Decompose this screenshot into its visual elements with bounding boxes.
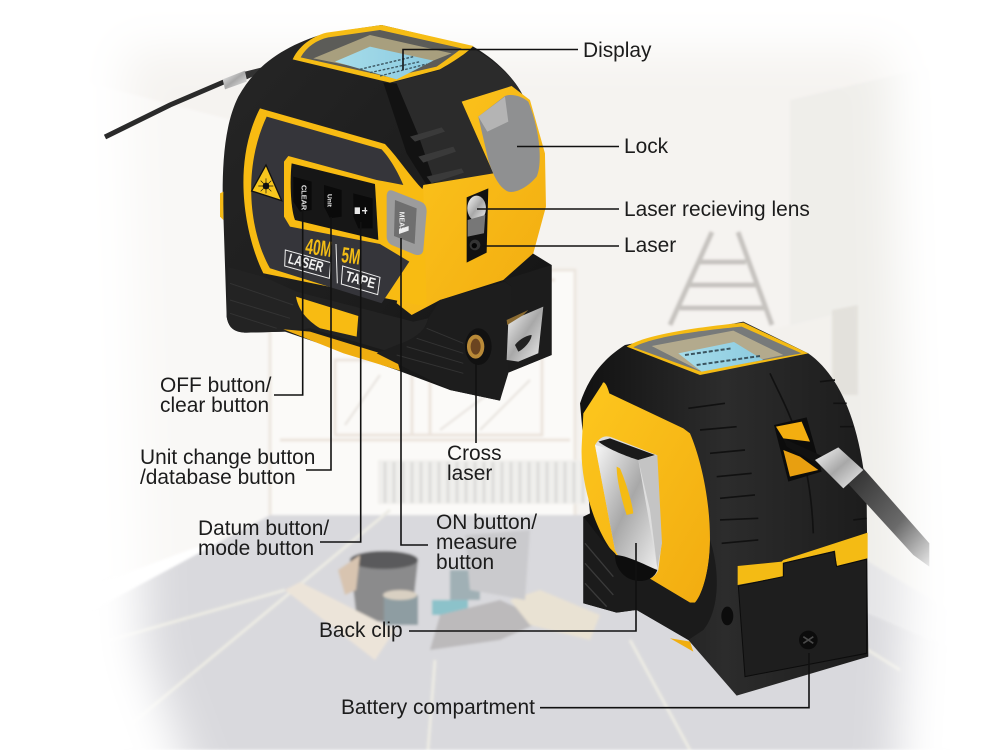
MEAS button: MEAS: [397, 212, 404, 232]
display bezel: [293, 25, 473, 83]
callout: on button: [401, 238, 537, 574]
background: faded room photo: [126, 54, 920, 750]
cable: [783, 438, 929, 567]
callout: cross laser: laser: [447, 462, 492, 485]
callout: off button: OFF button/: [160, 374, 272, 397]
lower grip: [227, 267, 428, 350]
callout: on button: button: [436, 551, 494, 574]
callout: unit change button: /database button: [140, 466, 296, 489]
cable clip: [223, 67, 267, 89]
yellow tab: [296, 297, 358, 337]
spec text: TAPE: [344, 268, 378, 292]
lens window: [467, 188, 488, 263]
spec text: 5M: [340, 242, 362, 269]
clear button: CLEAR: [299, 185, 308, 211]
rib marks: [688, 373, 867, 543]
body shell: [223, 25, 552, 401]
callout: battery compartment: Battery compartment: [341, 696, 535, 719]
button panel: [291, 163, 378, 240]
callout: off button: [160, 210, 303, 417]
yellow front ring: [243, 108, 427, 307]
top screen: [627, 323, 808, 375]
device: front view tape measure: [220, 25, 552, 401]
belt clip: [595, 436, 662, 581]
dark band at ridge: [383, 83, 435, 185]
paint cans and rolls: [285, 530, 600, 660]
cable behind top device: [105, 81, 226, 137]
callout: lock: Lock: [624, 135, 669, 158]
callout: on button: measure: [436, 531, 517, 554]
callout: cross laser: [447, 363, 502, 485]
lock slider: [478, 95, 540, 192]
dark front panel: [251, 117, 409, 303]
callout: datum button: mode button: [198, 537, 314, 560]
callout: unit change button: Unit change button: [140, 446, 315, 469]
unit button: Unit: [325, 194, 332, 208]
yellow stripe: [738, 533, 868, 585]
black grip at back: [583, 517, 717, 640]
battery door: [738, 552, 867, 677]
callout: display: Display: [583, 39, 652, 62]
cable slot: [774, 417, 822, 482]
grip ribs: [410, 127, 464, 183]
yellow right housing: [397, 86, 546, 315]
spec text: [285, 233, 380, 295]
callout: back clip: Back clip: [319, 619, 403, 642]
screws: [721, 607, 818, 649]
callout: off button: clear button: [160, 394, 269, 417]
callout: datum button: [198, 222, 361, 560]
callout: datum button: Datum button/: [198, 517, 329, 540]
callout: cross laser: Cross: [447, 442, 502, 465]
laser warning icon: [252, 165, 282, 201]
spec text: 40M: [304, 233, 334, 262]
spec text: LASER: [286, 250, 325, 276]
callout: laser: Laser: [624, 234, 676, 257]
datum button: [353, 193, 373, 228]
callout: display: [403, 39, 652, 70]
callout: unit change button: [140, 217, 331, 489]
body: [580, 322, 868, 696]
tape end hook: [507, 307, 543, 362]
callout: back clip: [319, 543, 636, 642]
tape base block: [377, 282, 512, 401]
callout: on button: ON button/: [436, 511, 537, 534]
callout: battery compartment: [341, 653, 809, 719]
yellow back face: [582, 382, 710, 603]
MEAS button: [387, 190, 427, 255]
top right face shading: [390, 48, 525, 184]
device: rear view tape measure: [580, 322, 929, 696]
callout: laser receiving lens: Laser recieving lens: [624, 198, 810, 221]
ladder: [670, 232, 772, 325]
